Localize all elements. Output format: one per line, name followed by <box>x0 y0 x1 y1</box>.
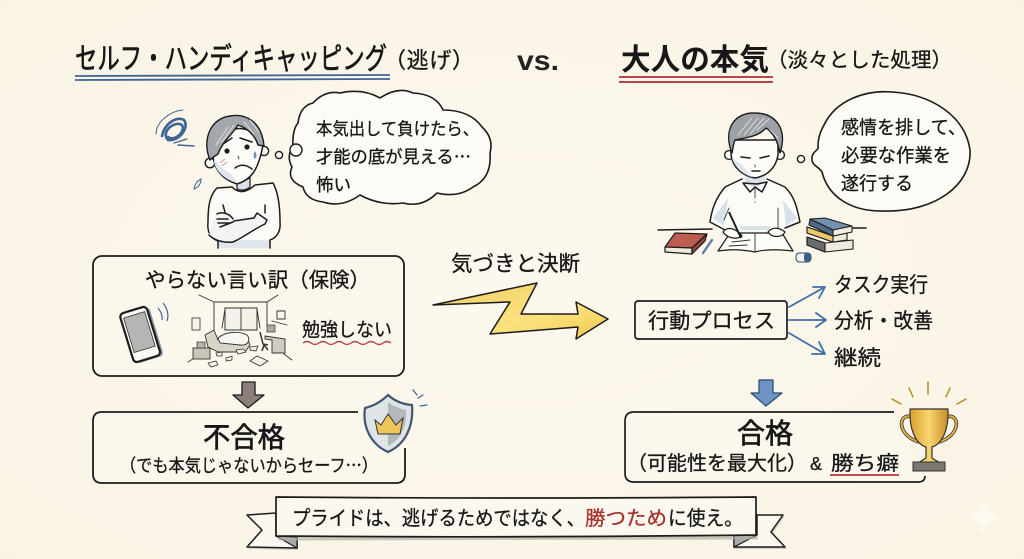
excuses heading: やらない言い訳（保険） <box>145 263 370 293</box>
icon: worried scribble <box>156 110 194 146</box>
pass heading: 合格 <box>737 412 793 452</box>
panel: fail <box>93 412 405 483</box>
thought bubble: calm <box>797 92 970 211</box>
icon: open notebook <box>718 233 793 252</box>
pass subtext <box>627 447 899 476</box>
pass subtext: & <box>810 454 822 474</box>
right heading: 大人の本気 <box>621 35 769 79</box>
icon: shield with crown <box>364 390 427 452</box>
banner message: プライドは、逃げるためではなく、 <box>292 502 585 531</box>
pass subtext: 勝ち癖 <box>831 447 899 476</box>
thought bubble: fear <box>275 90 491 204</box>
thought bubble: fear: 本気出して負けたら、 <box>316 116 479 141</box>
decision label: 気づきと決断 <box>451 247 580 278</box>
pass subtext: （可能性を最大化） <box>627 447 807 476</box>
thought bubble: calm: 感情を排して、 <box>841 114 966 140</box>
right heading: （淡々とした処理） <box>767 43 952 73</box>
thought bubble: fear: 怖い <box>316 172 351 197</box>
sparkle watermark <box>968 500 1000 535</box>
list: process steps <box>834 269 933 372</box>
no studying label: 勉強しない <box>302 315 392 342</box>
icon: focused man studying at desk <box>658 113 866 262</box>
banner: conclusion: に使え。 <box>668 502 743 531</box>
panel: pass <box>625 412 925 482</box>
fail heading: 不合格 <box>203 416 285 456</box>
icon: eraser <box>796 253 811 262</box>
arrows: process branches <box>789 287 826 354</box>
thought bubble: calm: 必要な作業を <box>841 142 951 168</box>
left heading: セルフ・ハンディキャッピング <box>75 34 387 78</box>
list: process steps: タスク実行 <box>834 269 928 299</box>
banner: conclusion <box>247 497 787 550</box>
icon: smartphone <box>119 303 168 364</box>
fail subtext: （でも本気じゃないからセーフ…） <box>120 452 378 478</box>
list: process steps: 分析・改善 <box>834 305 933 335</box>
icon: book stack <box>807 218 853 252</box>
thought bubble: calm: 遂行する <box>841 170 913 196</box>
icon: gold trophy <box>892 382 966 471</box>
banner right tail <box>734 515 787 549</box>
banner left tail <box>247 513 298 550</box>
process box: 行動プロセス <box>648 305 775 335</box>
process box <box>635 301 787 339</box>
arrow: down to fail <box>233 382 264 408</box>
thought bubble: fear: 才能の底が見える… <box>316 144 471 169</box>
arrow: down to pass <box>751 380 782 406</box>
left heading: （逃げ） <box>384 43 474 75</box>
icon: messy room <box>188 295 292 367</box>
panel: excuses <box>93 256 404 376</box>
icon: red closed book <box>665 233 707 254</box>
arrow: lightning bolt <box>433 283 608 339</box>
vs label: vs. <box>517 45 559 76</box>
right heading <box>619 35 952 82</box>
banner: conclusion: 勝つため <box>585 502 667 531</box>
head <box>237 178 250 190</box>
list: process steps: 継続 <box>834 342 881 372</box>
icon: anxious man with folded arms <box>194 115 280 248</box>
